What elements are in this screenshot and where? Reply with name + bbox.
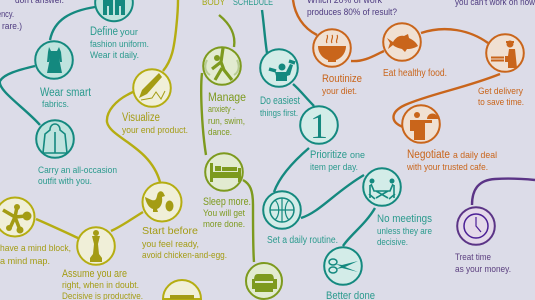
node: assume [62,227,143,300]
node: negotiate [402,105,497,173]
node: delivery [478,34,524,108]
node: define [90,0,149,60]
top clipped text fragments [0,0,535,31]
node: define: Wear it daily. [90,50,139,60]
node: carry outfit: outfit with you. [38,176,92,187]
node: carry outfit: Carry an all-occasion [38,165,117,176]
connector lines: teal schedule branch [262,10,375,246]
node: prioritize: 1 [310,106,328,146]
node: define: your [120,27,138,37]
node: prioritize: Prioritize [310,149,347,161]
node: fish: Eat healthy food. [383,68,447,79]
top clipped text fragments: produces 80% of result? [307,7,397,17]
node: no meetings: decisive. [377,237,408,248]
node: sleep: You will get [203,208,245,218]
node: sofa [246,263,282,299]
node: routinize: Routinize [322,73,362,85]
node: start: you feel ready, [142,239,199,250]
node: routinize [313,29,362,96]
connector lines: olive thinking branch [36,0,178,238]
node: time: Treat time [455,252,491,263]
node: start: avoid chicken-and-egg. [142,250,227,261]
node: prioritize: one [350,150,365,160]
node: wear smart [35,41,92,109]
node: time: as your money. [455,264,511,275]
node: wear smart: fabrics. [42,99,69,109]
node: mind map [0,198,71,267]
node: routine: Set a daily routine. [267,235,338,246]
node: no meetings [363,168,432,248]
node: assume: right, when in doubt. [62,280,139,291]
connector lines: teal style branch [0,7,95,125]
node: do easiest [260,49,300,118]
node: visualize: your end product. [122,125,188,135]
node: scissors [324,247,375,300]
node: carry outfit [36,120,117,187]
node: do easiest: Do easiest [260,95,300,107]
node: negotiate: Negotiate [407,149,450,161]
connector lines: orange diet branch [293,0,500,127]
node: manage: run, swim, [208,116,245,126]
node: sleep: Sleep more. [203,196,251,208]
node: define: fashion uniform. [90,39,149,49]
node: manage: dance. [208,127,232,137]
node: assume: Assume you are [62,268,127,280]
node: routine [263,191,338,246]
node: manage: anxiety - [208,104,235,114]
node: start [142,182,227,261]
node: manage: Manage [208,92,246,104]
node: do easiest: things first. [260,108,298,118]
node: routinize: your diet. [322,86,357,96]
node: negotiate: a daily deal [453,150,497,161]
node: prioritize: item per day. [310,162,358,172]
node: visualize: Visualize [122,112,160,124]
node: fish [383,23,447,79]
node: start: Start before [142,225,198,237]
node: bottom olive partial [163,280,201,299]
node: no meetings: No meetings [377,213,432,225]
node: sleep [203,153,251,229]
connector line: purple time branch [472,179,535,205]
node: sleep: more done. [203,219,245,229]
node: mind map: have a mind block, [0,243,71,254]
node: delivery: to save time. [478,97,524,108]
node: no meetings: unless they are [377,226,432,237]
node: prioritize [300,106,365,172]
node: define: Define [90,26,118,38]
connector lines: green body branch [201,15,254,262]
node: manage [203,47,246,137]
node: wear smart: Wear smart [40,87,92,99]
node: time [455,207,511,275]
node: delivery: Get delivery [478,86,523,97]
node: visualize [122,69,188,135]
top clipped text fragments: rare.) [2,21,22,31]
node: mind map: a mind map. [0,256,50,267]
node: negotiate: with your trusted cafe. [406,162,488,173]
